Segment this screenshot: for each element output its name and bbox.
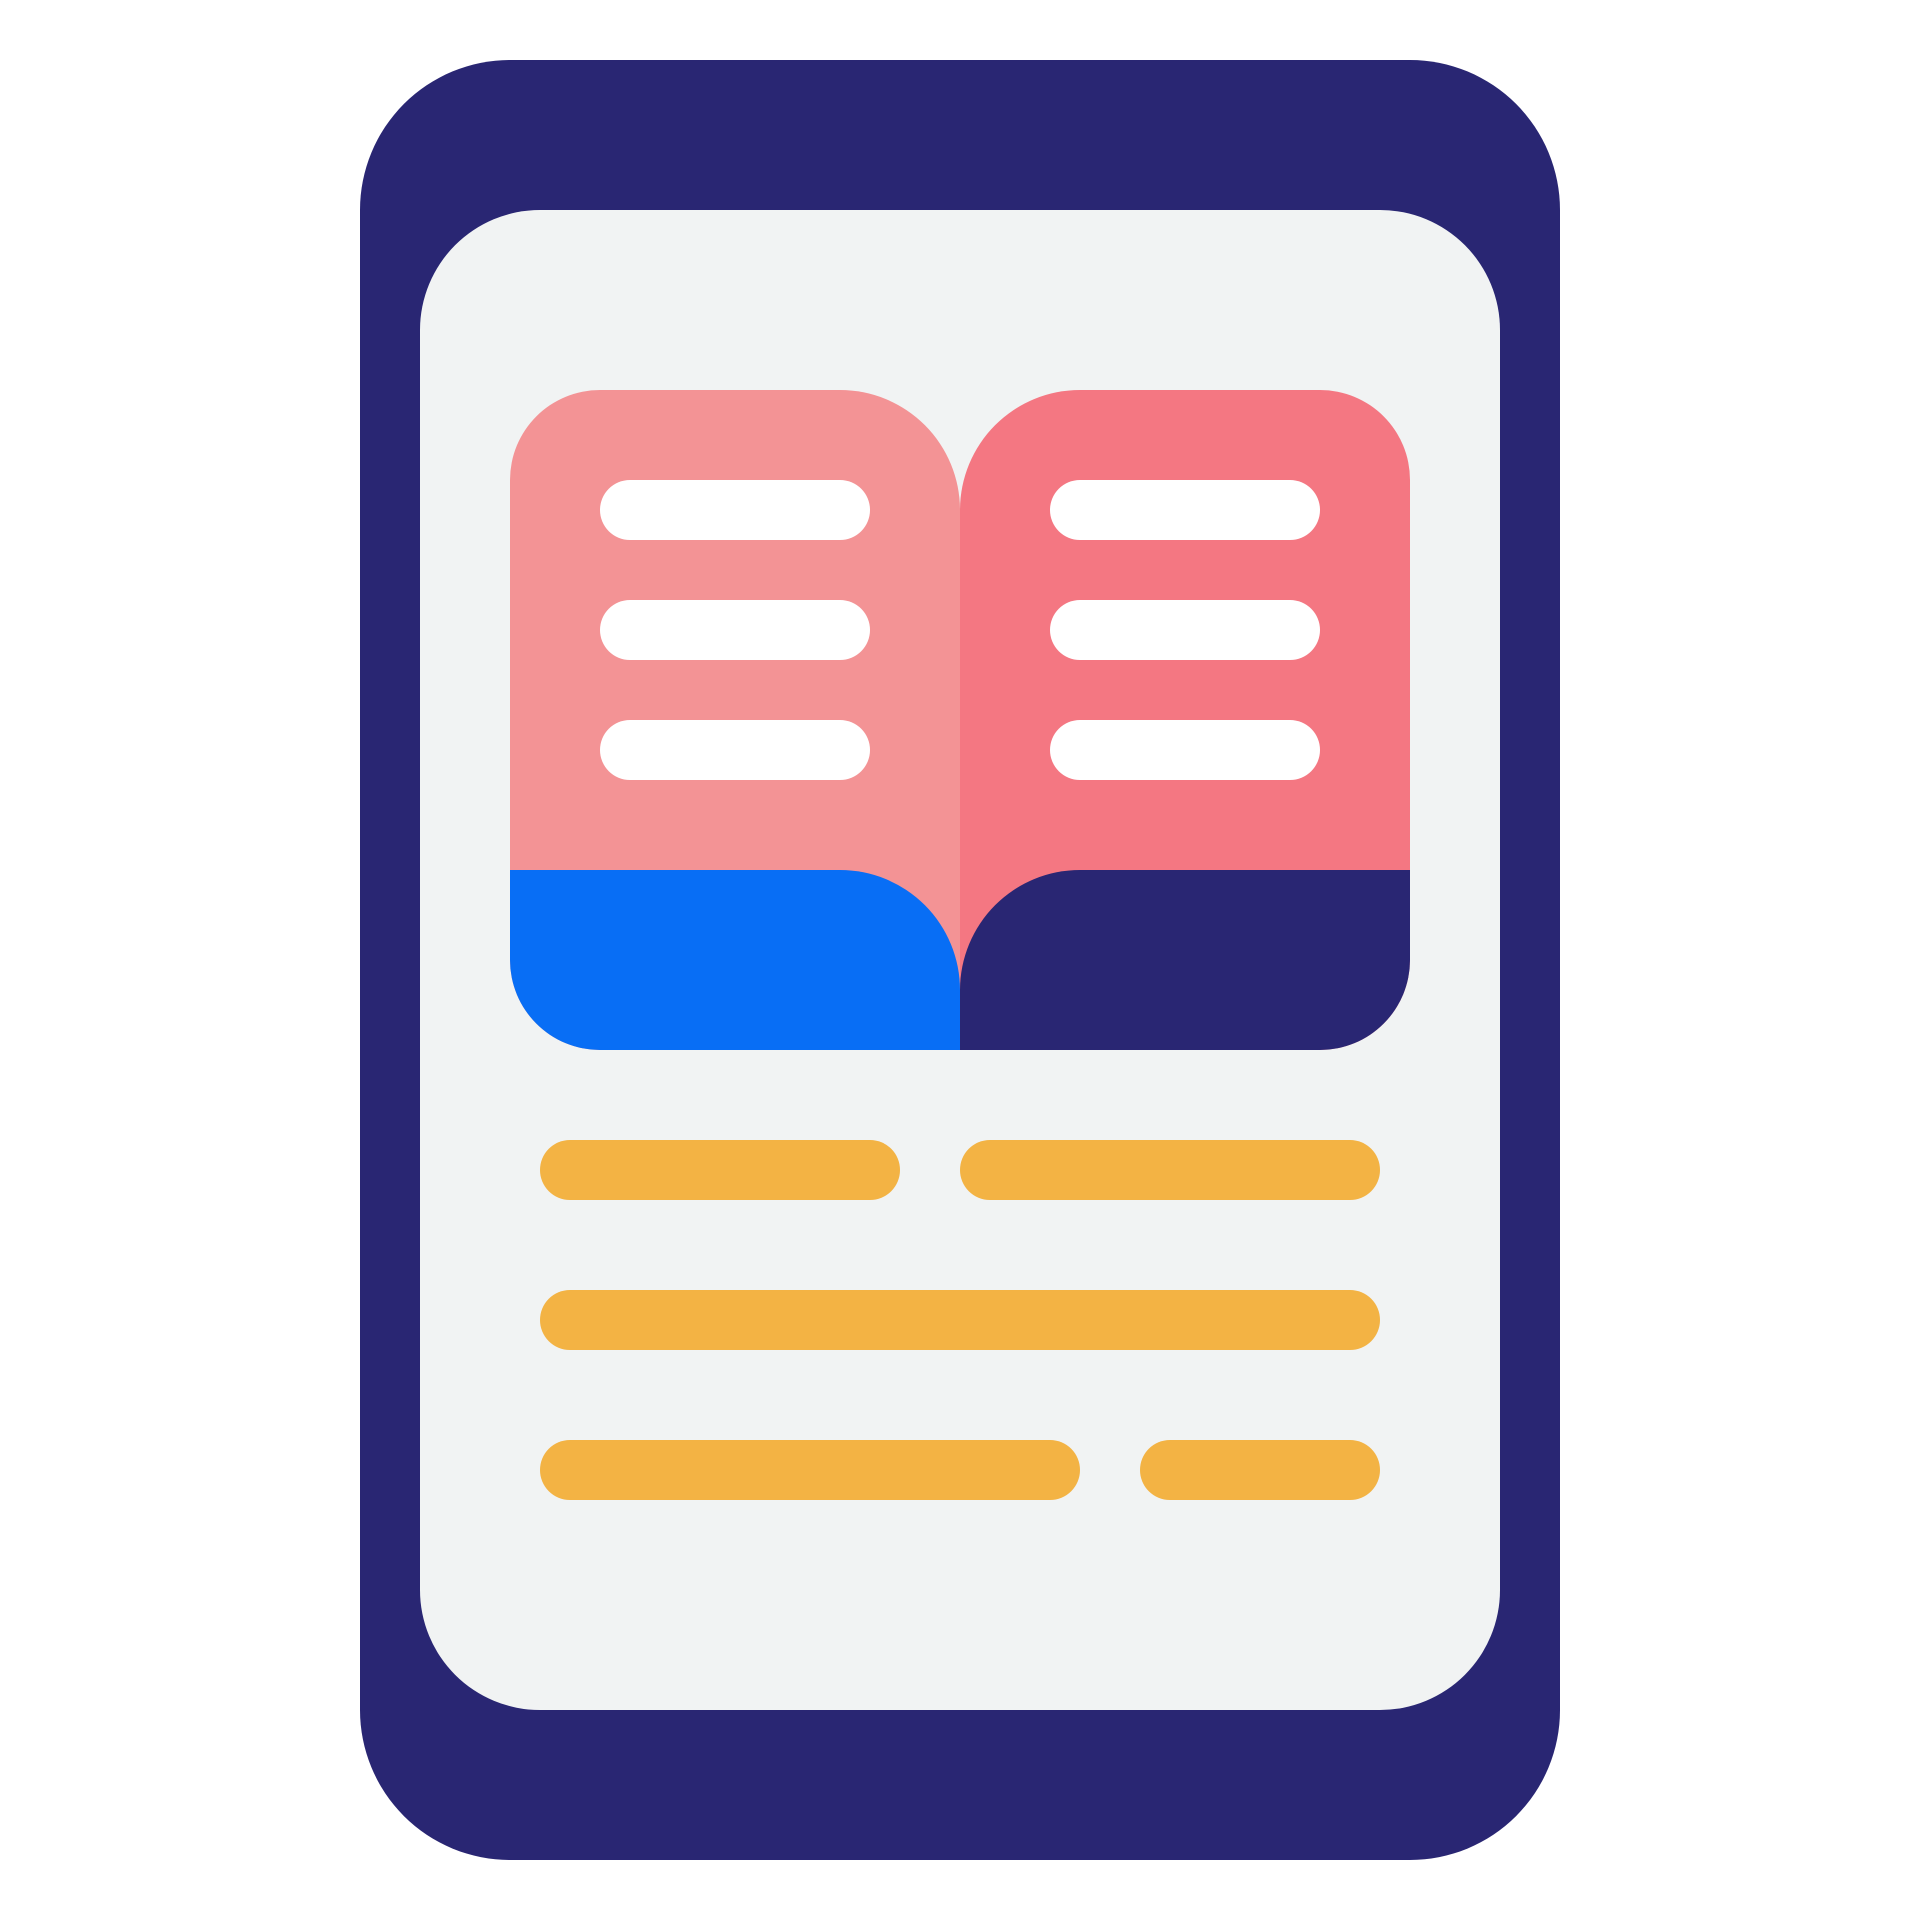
left page text lines (600, 480, 870, 780)
description text lines (540, 1140, 1380, 1500)
open book (510, 390, 1410, 1050)
tablet screen (420, 210, 1500, 1710)
line 3 left (540, 1440, 1080, 1500)
line 1 left (540, 1140, 900, 1200)
left book page (510, 390, 960, 1050)
right book page (960, 390, 1410, 1050)
left book cover (510, 870, 960, 1050)
right book cover (960, 870, 1410, 1050)
line 1 right (960, 1140, 1380, 1200)
tablet body (360, 60, 1560, 1860)
right page text lines (1050, 480, 1320, 780)
line 3 right (1140, 1440, 1380, 1500)
line 2 (540, 1290, 1380, 1350)
